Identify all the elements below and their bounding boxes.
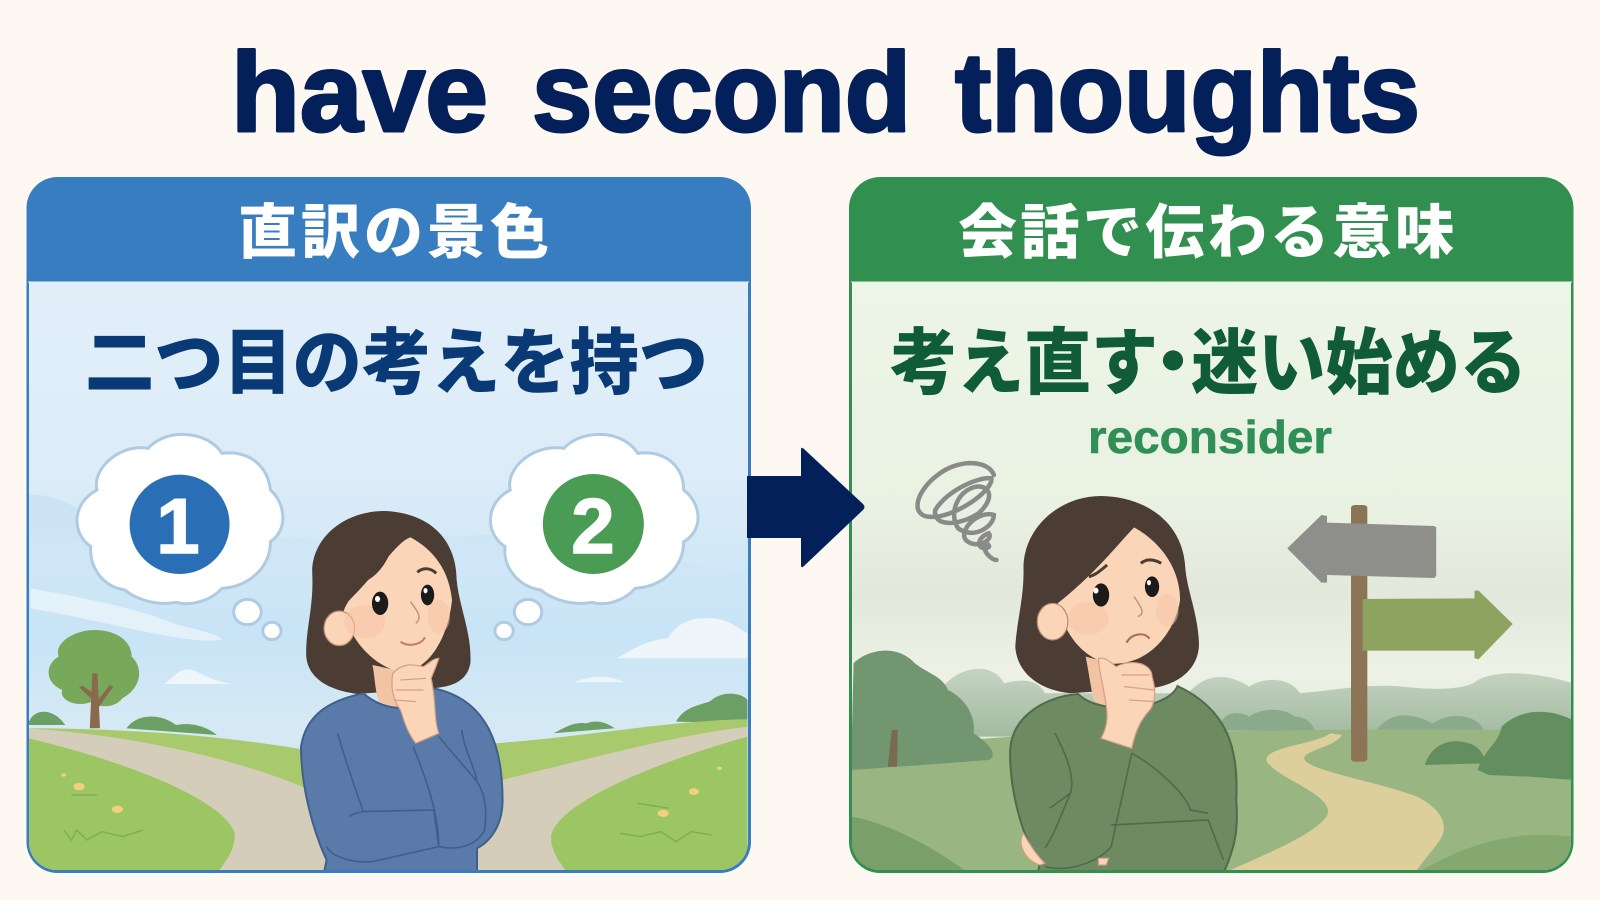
misty trees xyxy=(943,669,1573,737)
meaning subtitle xyxy=(890,326,1520,396)
thought bubble 1 xyxy=(77,434,283,640)
title: second xyxy=(532,30,911,155)
title: have xyxy=(231,30,488,155)
number 2: 2 xyxy=(571,482,615,570)
bushes xyxy=(28,712,217,735)
sign: green arrow xyxy=(1363,591,1513,659)
panel: conversational meaning xyxy=(849,177,1574,873)
header label: 直訳の景色 xyxy=(238,200,549,266)
meaning subtitle: 迷い始める xyxy=(1191,324,1527,404)
illustration: crossroads scene xyxy=(28,282,748,873)
thought bubble 2 xyxy=(490,434,698,640)
meaning subtitle: ・ xyxy=(1137,324,1209,404)
panel inner border xyxy=(28,281,749,283)
ground xyxy=(851,730,1573,873)
panel frame and header xyxy=(849,177,1574,873)
winding path xyxy=(1223,733,1444,873)
person: smiling woman in blue xyxy=(301,511,503,873)
illustration: hesitating scene xyxy=(851,282,1573,873)
number 1: 1 xyxy=(156,482,200,570)
panel: literal scene xyxy=(26,177,751,873)
panel frame and header xyxy=(26,177,751,873)
scribble xyxy=(918,463,996,560)
arrow xyxy=(747,448,864,567)
tree xyxy=(49,630,139,728)
sign: grey arrow xyxy=(1287,515,1436,583)
signpost xyxy=(1287,505,1513,762)
foreground grass xyxy=(28,738,235,873)
meaning subtitle: 考え直す xyxy=(890,324,1158,404)
title xyxy=(231,30,1420,155)
roads xyxy=(28,728,332,873)
literal subtitle: 二つ目の考えを持つ xyxy=(85,324,708,404)
header label: 会話で伝わる意味 xyxy=(958,200,1454,266)
dark bushes xyxy=(851,651,993,770)
person: worried woman in green xyxy=(1010,496,1237,873)
reconsider: reconsider xyxy=(1088,411,1332,463)
hills xyxy=(28,728,306,873)
title: thoughts xyxy=(955,30,1420,155)
